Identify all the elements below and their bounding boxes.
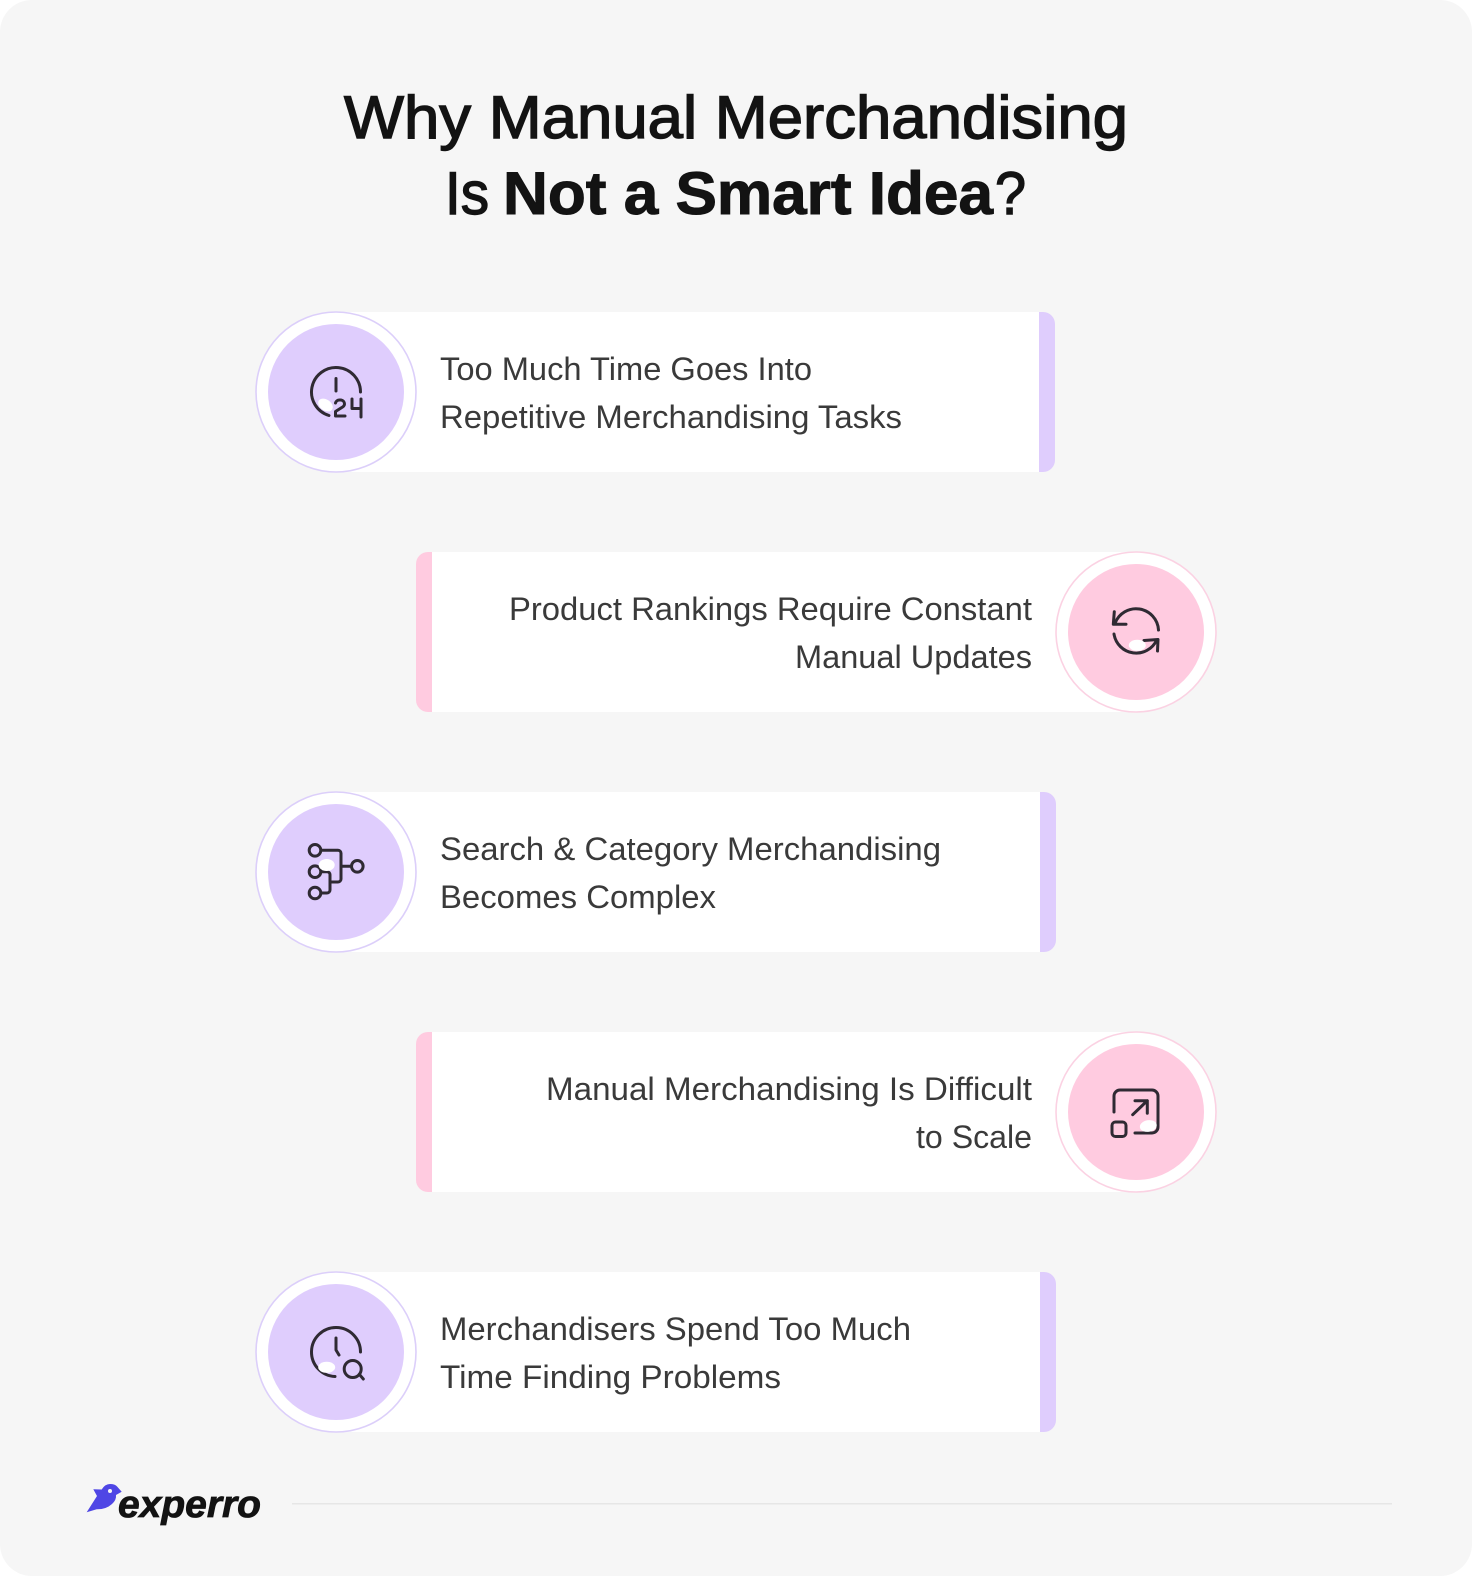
- panel: card 5: [256, 1272, 1056, 1432]
- icon: refresh arrows: [1113, 609, 1158, 653]
- text: card 3: [440, 831, 941, 915]
- text: card 5: Time Finding Problems: [440, 1359, 781, 1395]
- text: card 4: to Scale: [916, 1119, 1032, 1155]
- text: card 3: Becomes Complex: [440, 879, 716, 915]
- title: ?: [995, 160, 1026, 227]
- text: card 1: Too Much Time Goes Into: [440, 351, 812, 387]
- text: card 2: [509, 591, 1032, 675]
- panel: card 3: [256, 792, 1056, 952]
- text: card 5: Merchandisers Spend Too Much: [440, 1311, 911, 1347]
- title: Why Manual Merchandising: [344, 84, 1128, 151]
- text: card 2: Manual Updates: [795, 639, 1032, 675]
- text: card 5: [440, 1311, 911, 1395]
- title: Is: [445, 160, 489, 227]
- title: Not a Smart Idea: [503, 160, 994, 227]
- icon: 24-hour clock: [312, 368, 361, 417]
- text: card 4: Manual Merchandising Is Difficult: [546, 1071, 1032, 1107]
- panel: card 1: [256, 312, 1055, 472]
- icon: scale arrow: [1112, 1090, 1158, 1136]
- title: [344, 84, 1128, 227]
- icon: bird: [87, 1484, 122, 1512]
- icon: clock with magnifier: [312, 1328, 363, 1379]
- text: card 3: Search & Category Merchandising: [440, 831, 941, 867]
- panel: card 4: [416, 1032, 1216, 1192]
- logo wordmark: experro: [118, 1484, 261, 1526]
- panel: card 2: [416, 552, 1216, 712]
- logo: experro: [87, 1484, 261, 1526]
- text: card 1: Repetitive Merchandising Tasks: [440, 399, 902, 435]
- text: card 4: [546, 1071, 1032, 1155]
- text: card 2: Product Rankings Require Constant: [509, 591, 1032, 627]
- text: card 1: [440, 351, 902, 435]
- icon: flow hierarchy: [309, 844, 363, 899]
